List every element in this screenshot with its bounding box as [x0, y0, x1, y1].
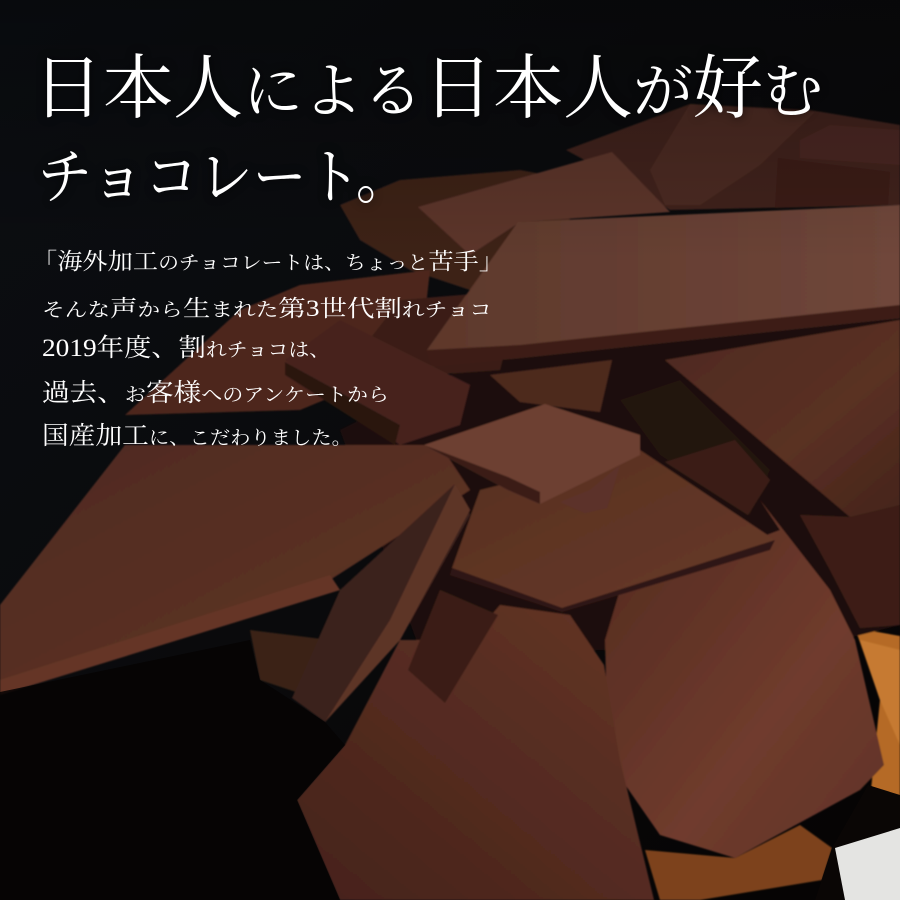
- dark underlay between pieces: [340, 300, 900, 650]
- wooden board: [250, 628, 900, 900]
- back pieces, upper right: [566, 104, 900, 210]
- piece: large top right slab: [427, 205, 900, 366]
- heading shadow: [33, 51, 823, 211]
- piece: right mid slab: [665, 320, 900, 628]
- piece: centre large: [450, 450, 775, 612]
- back piece centre top: [340, 170, 600, 290]
- photo shadow top: [0, 0, 900, 260]
- body text: 2019年度、割 れチョコは、: [42, 334, 330, 362]
- white cloth corner: [835, 828, 900, 900]
- piece: small top centre: [424, 404, 640, 513]
- body text: 「海外加工 のチョコレートは、ちょっと 苦手」: [32, 249, 504, 274]
- piece: bottom centre big: [297, 605, 654, 900]
- piece: bottom centre-right large: [605, 500, 884, 858]
- heading shadow: チョコレート。: [38, 145, 410, 211]
- body text: そんな 声から 生まれた 第3世代割 れチョコ: [42, 296, 492, 321]
- piece: upright dark shard: [292, 484, 498, 722]
- photo shadow bottom left: [0, 640, 345, 900]
- heading: チョコレート。: [38, 145, 410, 211]
- heading: 日本人による日本人が好む: [33, 51, 823, 128]
- piece: left mid: [125, 270, 430, 415]
- body text: [32, 249, 504, 450]
- body text: 過去、 お客様 へのアンケートから: [42, 379, 389, 407]
- dark floor bottom right: [815, 785, 900, 900]
- body text: 国産加工 に、こだわりました。: [42, 422, 352, 450]
- heading: [33, 51, 823, 211]
- piece: small centre stack: [365, 290, 520, 375]
- piece: big left slab: [0, 445, 470, 695]
- piece: dark gaps centre right: [620, 380, 770, 515]
- heading shadow: 日本人による日本人が好む: [33, 51, 823, 128]
- piece: top centre slab: [418, 152, 670, 255]
